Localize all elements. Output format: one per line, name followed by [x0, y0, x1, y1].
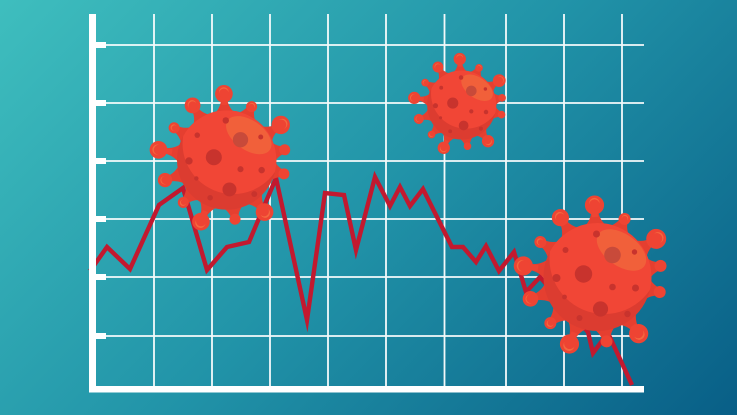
icon: large virus lower right: [512, 195, 673, 359]
chart grid: [92, 14, 644, 386]
chart axes with tick marks: [89, 14, 644, 392]
icon: virus upper left: [148, 84, 296, 235]
icon: small virus top centre: [407, 52, 510, 157]
red declining trend line: [90, 177, 632, 385]
